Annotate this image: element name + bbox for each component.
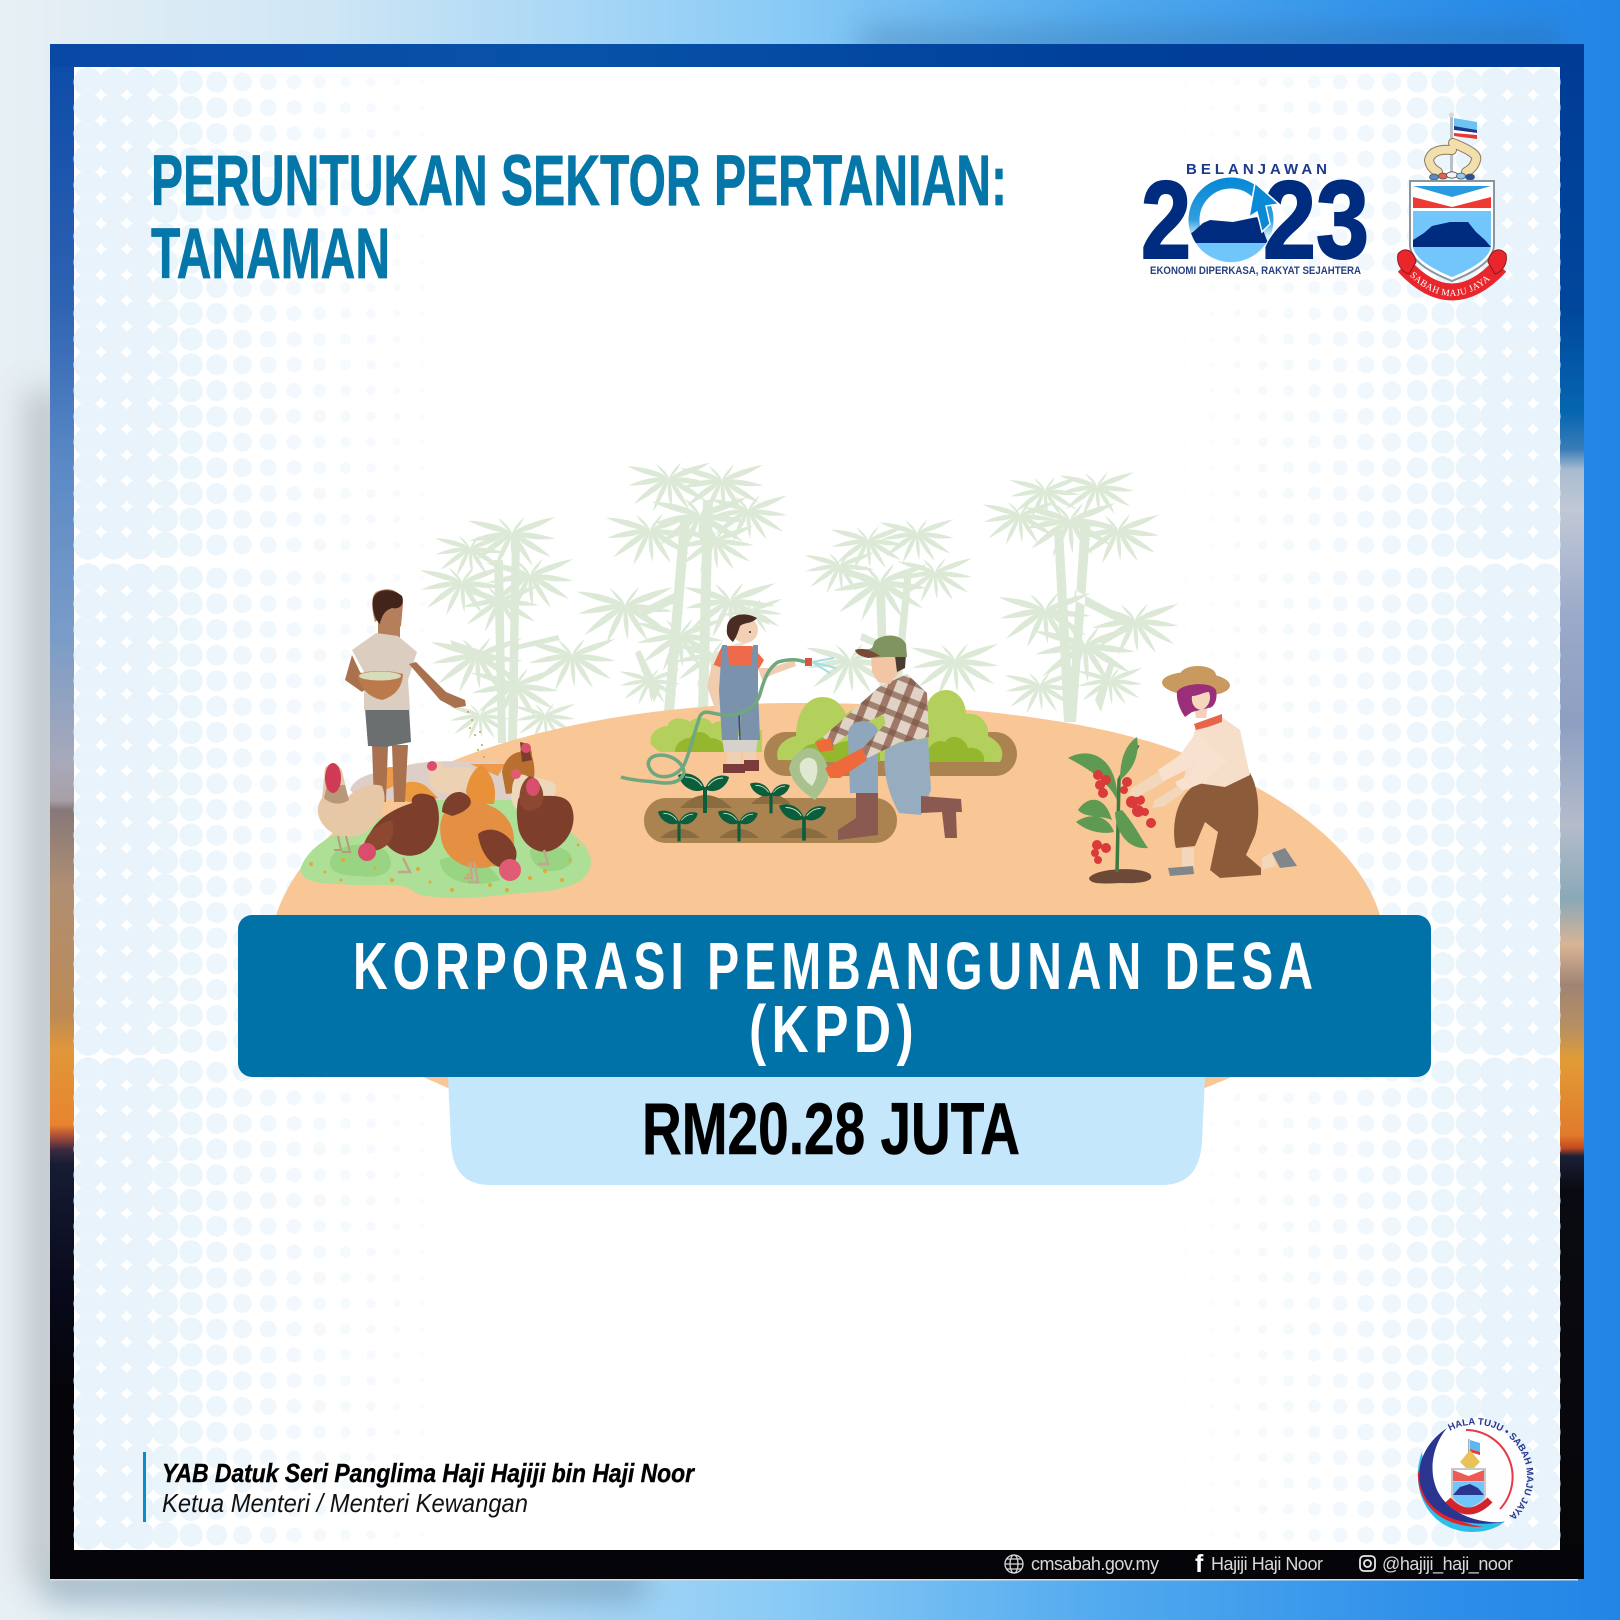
bamboo clump B	[576, 461, 788, 712]
bamboo clump A	[419, 515, 617, 743]
shield	[1410, 181, 1494, 281]
logo heading: BELANJAWAN	[1186, 161, 1327, 178]
bamboo background	[419, 461, 1180, 743]
footer social links	[1005, 1550, 1513, 1578]
logo: Belanjawan 2023: 23	[1263, 159, 1369, 282]
feed falling	[467, 711, 485, 758]
amount: RM20.28 JUTA	[642, 1089, 1020, 1170]
soil bed back	[764, 732, 1017, 776]
attribution block	[143, 1452, 696, 1522]
crescent	[1418, 1428, 1505, 1532]
hose and spray	[621, 658, 836, 783]
boots	[838, 792, 878, 840]
scroll motto: SABAH MAJU JAYA	[1410, 272, 1490, 296]
red arc	[1466, 1430, 1513, 1509]
lower sleeve	[861, 717, 907, 758]
crest beads	[1430, 172, 1474, 180]
panel: program name banner	[238, 915, 1431, 1077]
banner line 2: (KPD)	[749, 992, 919, 1067]
woman farmer	[1128, 666, 1297, 878]
attribution rule	[143, 1452, 146, 1522]
rear leg	[885, 738, 931, 815]
facebook name: Hajiji Haji Noor	[1211, 1554, 1323, 1574]
flag and pole	[1449, 112, 1477, 178]
man feeding chickens	[345, 589, 466, 802]
lettuce	[789, 748, 828, 800]
head and cap	[855, 636, 907, 684]
arms	[1429, 143, 1476, 172]
scroll text path	[1404, 270, 1500, 296]
icon: globe	[1005, 1555, 1023, 1573]
minister name: YAB Datuk Seri Panglima Haji Hajiji bin Haji Noor	[162, 1458, 696, 1488]
ground mound	[276, 703, 1380, 1088]
boy with hose	[707, 614, 796, 773]
back bush left	[651, 718, 762, 752]
circular text: HALA TUJU • SABAH MAJU JAYA	[1448, 1418, 1534, 1519]
title line 2: TANAMAN	[151, 215, 390, 294]
pepper plant	[1068, 737, 1156, 883]
mini crest	[1448, 1439, 1490, 1511]
back chickens flock	[350, 742, 556, 812]
chicken: orange big	[440, 792, 521, 882]
hair and face	[1177, 684, 1217, 717]
bamboo clump D	[982, 471, 1180, 722]
circular text path	[1450, 1425, 1527, 1522]
straw hat	[1161, 666, 1231, 698]
minister role: Ketua Menteri / Menteri Kewangan	[162, 1488, 528, 1518]
logo year digits: 2	[1141, 159, 1191, 282]
icon: facebook f: f	[1195, 1550, 1204, 1578]
instagram handle: @hajiji_haji_noor	[1382, 1554, 1513, 1575]
chicken: beige	[318, 763, 385, 852]
logo: Hala Tuju Sabah Maju Jaya	[1417, 1418, 1534, 1532]
shirt torso	[879, 674, 929, 742]
panel: allocation amount	[448, 1077, 1205, 1185]
chicken: brown right	[517, 776, 574, 864]
logo: Sabah coat of arms	[1397, 112, 1507, 300]
illustration: farm scene	[276, 461, 1380, 1088]
green chicken patch	[300, 800, 591, 898]
front leg	[848, 721, 879, 793]
man crouching with plaid shirt	[789, 636, 962, 840]
logo: Belanjawan 2023	[1143, 164, 1366, 276]
website: cmsabah.gov.my	[1031, 1554, 1159, 1574]
bamboo clump C	[804, 518, 1000, 700]
icon: instagram	[1360, 1556, 1375, 1571]
seedlings	[658, 774, 828, 841]
back bush right	[777, 690, 1002, 762]
soil bed front	[644, 798, 897, 843]
gloves	[815, 738, 867, 778]
upper sleeve	[823, 687, 886, 747]
scroll	[1397, 249, 1507, 300]
chicken: brown left	[358, 794, 439, 872]
logo ring	[1188, 178, 1274, 262]
logo arrow	[1249, 183, 1279, 232]
logo tagline: EKONOMI DIPERKASA, RAKYAT SEJAHTERA	[1150, 265, 1361, 277]
title	[151, 142, 1007, 294]
title line 1: PERUNTUKAN SEKTOR PERTANIAN:	[151, 142, 1007, 221]
